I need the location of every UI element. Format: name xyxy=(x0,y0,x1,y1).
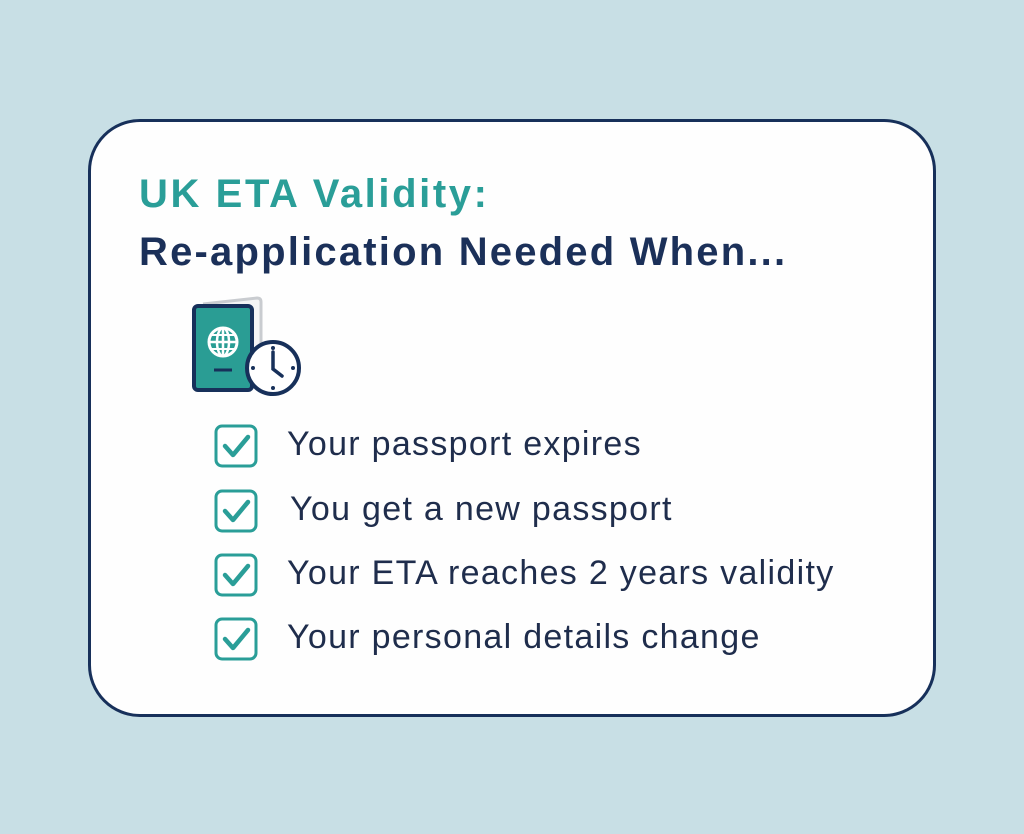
subtitle: Re-application Needed When... xyxy=(139,230,787,274)
item 2: You get a new passport xyxy=(290,490,673,528)
title: UK ETA Validity: xyxy=(139,172,490,216)
item 1: Your passport expires xyxy=(287,425,642,463)
icon: passport with clock xyxy=(192,296,301,396)
card panel xyxy=(88,119,936,717)
item 4: Your personal details change xyxy=(287,618,761,656)
item 3: Your ETA reaches 2 years validity xyxy=(287,554,834,592)
